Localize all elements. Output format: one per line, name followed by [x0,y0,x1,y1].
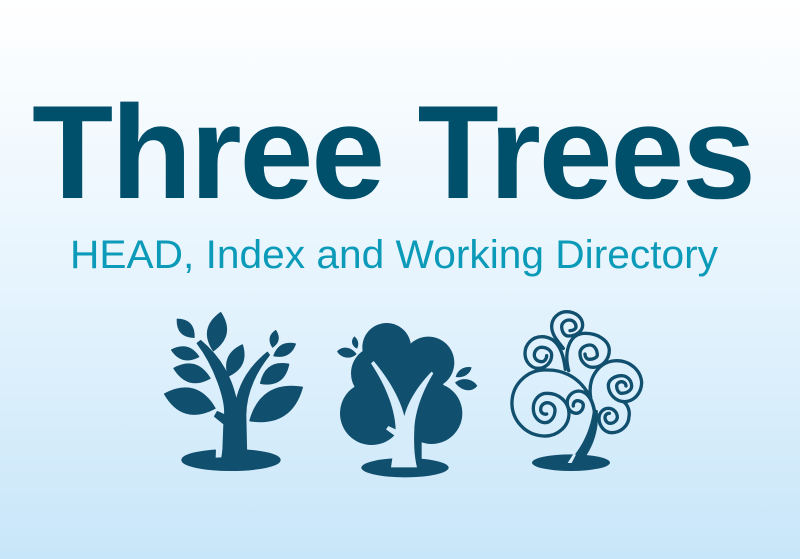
left small spiral [525,337,565,369]
icon: round crown tree [337,323,477,477]
right large spiral [590,361,642,402]
big left spiral [512,370,595,436]
icon: spiral tree [512,312,642,471]
small centre spiral [567,391,594,413]
icon: leafy tree [165,313,302,470]
lower right spiral [599,402,629,433]
title: Three Trees [32,79,756,227]
subtitle: HEAD, Index and Working Directory [70,233,718,277]
top spiral [552,312,583,348]
middle top spiral [567,333,609,371]
